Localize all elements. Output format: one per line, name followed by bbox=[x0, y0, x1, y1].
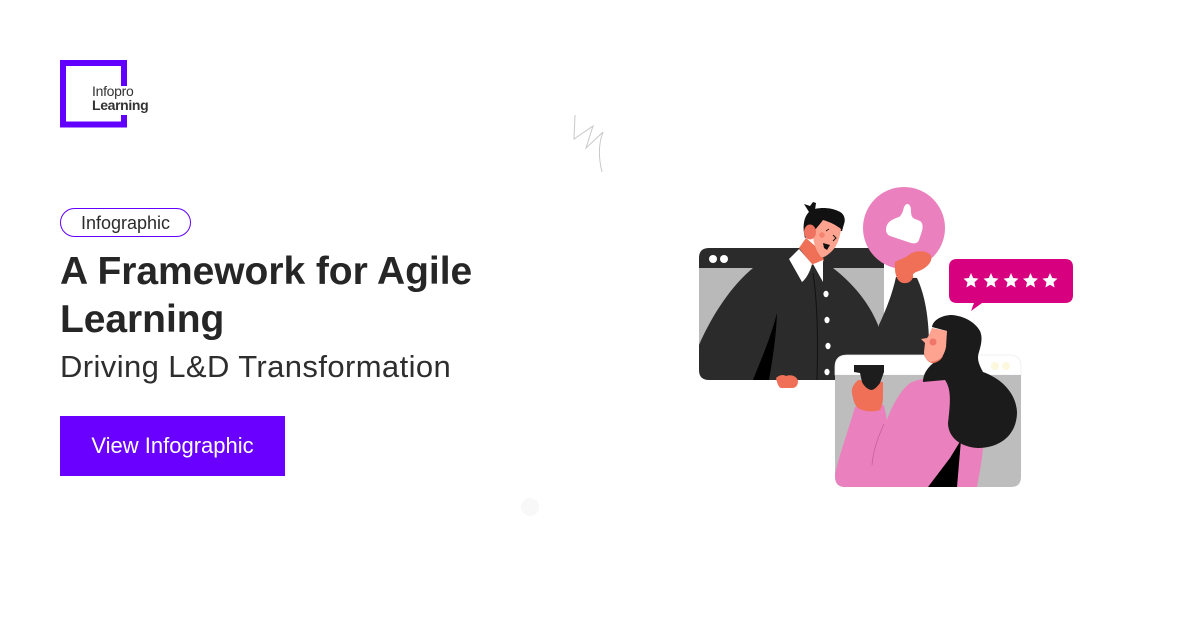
rating speech bubble bbox=[949, 259, 1073, 311]
shirt bbox=[928, 440, 961, 487]
logo wordmark: Learning bbox=[92, 97, 148, 113]
torso bbox=[699, 250, 878, 380]
logo mark: open purple square bbox=[60, 60, 127, 128]
title: Learning bbox=[60, 298, 224, 341]
tag pill: Infographic bbox=[81, 213, 170, 233]
hair tuft bbox=[804, 202, 816, 212]
collar bbox=[789, 249, 823, 282]
face bbox=[921, 328, 947, 362]
neck bbox=[799, 238, 824, 265]
hand bbox=[852, 380, 883, 411]
buttons bbox=[823, 291, 831, 375]
tag pill bbox=[60, 208, 191, 237]
man window bbox=[699, 248, 884, 368]
face bbox=[813, 220, 841, 257]
button bbox=[60, 416, 285, 476]
raised arm bbox=[878, 277, 929, 358]
ear bbox=[804, 224, 816, 240]
man figure bbox=[699, 202, 931, 388]
icon: thumbs up bbox=[886, 204, 923, 243]
subtitle: Driving L&D Transformation bbox=[60, 349, 451, 384]
logo bbox=[60, 60, 148, 128]
stars bbox=[964, 273, 1058, 288]
hair bbox=[804, 208, 845, 238]
mouth bbox=[823, 243, 830, 250]
hair bbox=[923, 315, 1017, 448]
hand up bbox=[895, 251, 931, 283]
coat shadow bbox=[753, 313, 777, 380]
woman figure bbox=[835, 315, 1017, 487]
sweater bbox=[835, 378, 983, 487]
like badge bbox=[863, 187, 945, 269]
logo wordmark: Infopro bbox=[92, 83, 134, 99]
title bbox=[60, 250, 472, 341]
neck bbox=[924, 350, 943, 363]
hand bottom bbox=[776, 375, 798, 388]
button: View Infographic bbox=[91, 433, 254, 458]
cup bbox=[854, 365, 884, 390]
woman window bbox=[835, 355, 1021, 487]
logo wordmark bbox=[92, 83, 148, 113]
title: A Framework for Agile bbox=[60, 250, 472, 293]
